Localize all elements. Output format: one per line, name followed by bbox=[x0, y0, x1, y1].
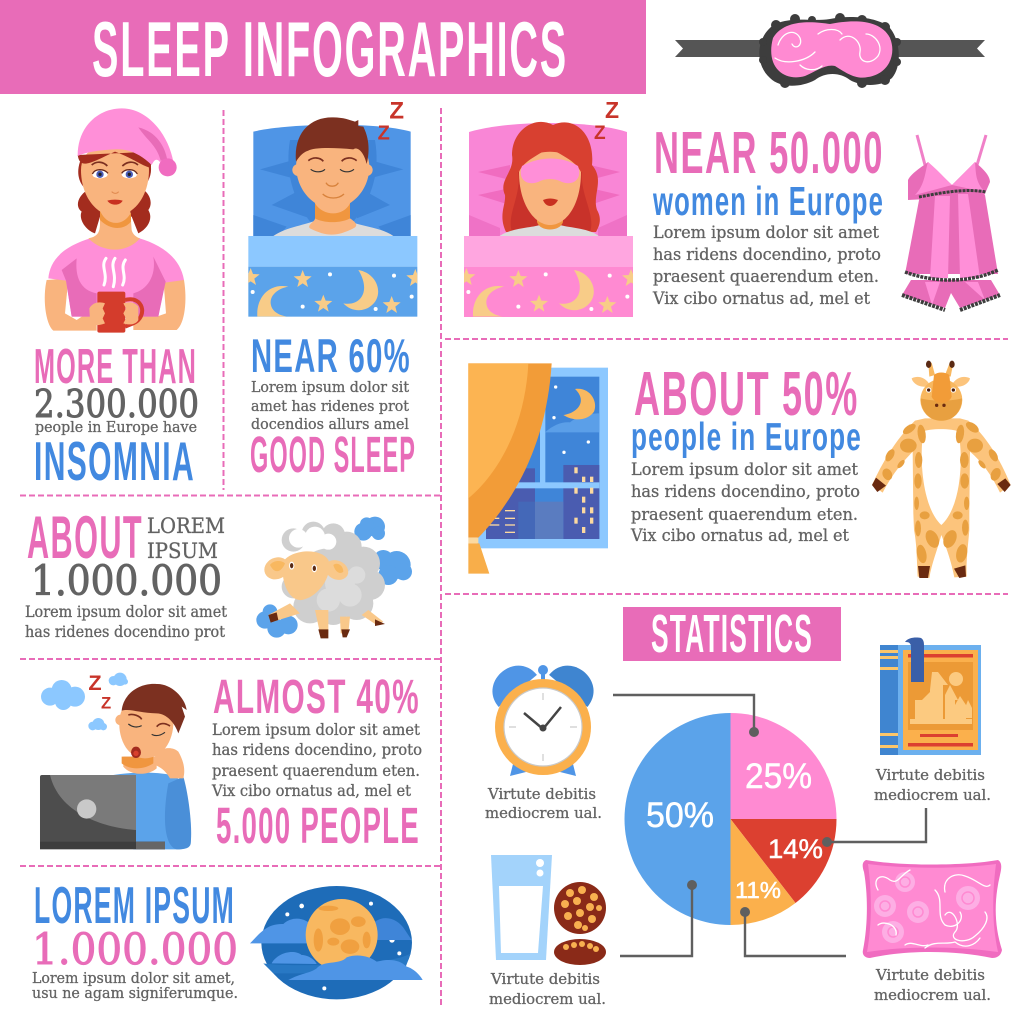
text: lorem ipsum: IPSUM bbox=[147, 539, 218, 563]
text: people in Europe have: people in Europe have bbox=[35, 418, 197, 436]
text: clock caption: mediocrem ual. bbox=[485, 804, 602, 822]
text: description: amet has ridenes prot bbox=[251, 397, 409, 415]
connector: book to 14% bbox=[822, 808, 926, 847]
icon: sleeping woman with mask: Z bbox=[605, 97, 619, 123]
pie chart: 11% bbox=[735, 877, 781, 903]
text: description: praesent quaerendum eten. bbox=[653, 267, 879, 286]
text: description: Lorem ipsum dolor sit amet, bbox=[32, 969, 235, 987]
icon: decorated pillow bbox=[863, 860, 1002, 958]
pie chart: 14% bbox=[768, 834, 823, 864]
text: description: usu ne agam signiferumque. bbox=[32, 984, 238, 1002]
heading: about: ABOUT bbox=[27, 504, 143, 571]
heading: insomnia: INSOMNIA bbox=[34, 430, 195, 492]
text: description: Vix cibo ornatus ad, mel et bbox=[652, 289, 870, 308]
text: description: Lorem ipsum dolor sit amet bbox=[653, 223, 879, 242]
pie chart bbox=[624, 713, 837, 925]
connector: clock to 25% bbox=[613, 695, 759, 737]
icon: book bbox=[880, 637, 981, 755]
text: clock caption bbox=[485, 785, 602, 822]
text: description: Vix cibo ornatus ad, mel et bbox=[211, 781, 412, 800]
text: milk caption: mediocrem ual. bbox=[489, 990, 606, 1008]
icon: night window with curtain bbox=[468, 363, 608, 574]
text: description bbox=[211, 720, 422, 800]
text: description bbox=[32, 969, 238, 1002]
text: description bbox=[251, 378, 409, 433]
title: SLEEP INFOGRAPHICS bbox=[92, 5, 568, 93]
text: GOOD SLEEP bbox=[250, 426, 416, 483]
heading: 5.000 people: 5.000 PEOPLE bbox=[216, 797, 420, 854]
connector: pillow to 11% bbox=[740, 907, 846, 956]
number: 1.000.000: 1.000.000 bbox=[32, 925, 238, 975]
heading: people in Europe: people in Europe bbox=[631, 416, 862, 459]
heading: women in Europe: women in Europe bbox=[652, 178, 884, 224]
heading: near 60%: NEAR 60% bbox=[251, 329, 411, 382]
text: milk caption: Virtute debitis bbox=[490, 970, 600, 988]
text: pillow caption bbox=[874, 966, 991, 1004]
text: book caption bbox=[874, 766, 991, 804]
icon: alarm clock bbox=[483, 656, 603, 776]
text: pillow caption: mediocrem ual. bbox=[874, 986, 991, 1004]
text: book caption: Virtute debitis bbox=[875, 766, 985, 784]
text: pillow caption: Virtute debitis bbox=[875, 966, 985, 984]
text: description: has ridens docendino, proto bbox=[653, 245, 881, 264]
icon: nightgown bbox=[902, 135, 1000, 310]
icon: glass of milk and cookies bbox=[491, 855, 606, 965]
text: description: praesent quaerendum eten. bbox=[212, 761, 420, 780]
number: 2.300.000: 2.300.000 bbox=[34, 382, 199, 426]
text: description: has ridens docendino, proto bbox=[212, 740, 422, 759]
heading: about 50%: ABOUT 50% bbox=[634, 360, 859, 429]
text: lorem ipsum: LOREM bbox=[147, 514, 225, 538]
icon: full moon and clouds bbox=[250, 886, 423, 999]
panel: about 1.000.000 bbox=[25, 504, 412, 641]
panel: almost 40% bbox=[40, 670, 422, 854]
icon: sleeping woman with mask bbox=[457, 97, 640, 317]
text: description bbox=[25, 602, 228, 641]
panel: header banner bbox=[0, 0, 646, 94]
text: description: Vix cibo ornatus ad, mel et bbox=[630, 526, 849, 545]
heading: statistics bbox=[623, 604, 841, 664]
icon: sleepy man at laptop: Z bbox=[88, 670, 102, 695]
panel: about 50% people bbox=[468, 360, 1011, 578]
panel: near 50.000 women bbox=[457, 97, 1000, 317]
text: book caption: mediocrem ual. bbox=[874, 786, 991, 804]
icon: sleepy man at laptop bbox=[40, 670, 191, 849]
text: description: Lorem ipsum dolor sit amet bbox=[631, 460, 858, 479]
icon: sleeping man in bed: Z bbox=[378, 122, 390, 144]
heading: lorem ipsum: LOREM IPSUM bbox=[34, 877, 235, 935]
icon: sleepy man at laptop: Z bbox=[101, 693, 111, 712]
text: description: praesent quaerendum eten. bbox=[631, 505, 858, 524]
panel: lorem ipsum moon bbox=[32, 877, 423, 1002]
icon: giraffe onesie bbox=[872, 361, 1011, 578]
connector: milk to 50% bbox=[620, 880, 697, 956]
text: description bbox=[630, 460, 860, 545]
panel: good sleep bbox=[242, 97, 424, 483]
text: description: has ridens docendino, proto bbox=[631, 482, 860, 501]
icon: woman with mug bbox=[45, 108, 185, 333]
icon: sheep with clouds bbox=[256, 517, 412, 638]
text: lorem ipsum bbox=[147, 514, 225, 563]
panel: statistics bbox=[483, 604, 1002, 1008]
number: 1.000.000: 1.000.000 bbox=[31, 557, 222, 605]
heading: more than: MORE THAN bbox=[34, 340, 197, 394]
icon: sleeping man in bed bbox=[242, 97, 424, 317]
text: description: Lorem ipsum dolor sit amet bbox=[212, 720, 421, 739]
heading: statistics: STATISTICS bbox=[651, 604, 813, 664]
text: description bbox=[652, 223, 881, 308]
text: milk caption bbox=[489, 970, 606, 1008]
heading: almost 40%: ALMOST 40% bbox=[213, 671, 420, 724]
panel: insomnia bbox=[34, 108, 199, 492]
text: description: has ridenes docendino prot bbox=[25, 622, 226, 641]
pie chart: 50% bbox=[646, 796, 714, 835]
icon: sleeping man in bed: Z bbox=[389, 97, 404, 124]
text: description: docendios allurs amel bbox=[251, 415, 409, 433]
text: description: Lorem ipsum dolor sit bbox=[251, 378, 409, 396]
pie chart: 25% bbox=[745, 757, 812, 796]
icon: sleep mask on ribbon bbox=[675, 13, 985, 88]
icon: sleeping woman with mask: Z bbox=[594, 123, 606, 144]
text: description: Lorem ipsum dolor sit amet bbox=[25, 602, 228, 621]
text: clock caption: Virtute debitis bbox=[487, 785, 596, 803]
